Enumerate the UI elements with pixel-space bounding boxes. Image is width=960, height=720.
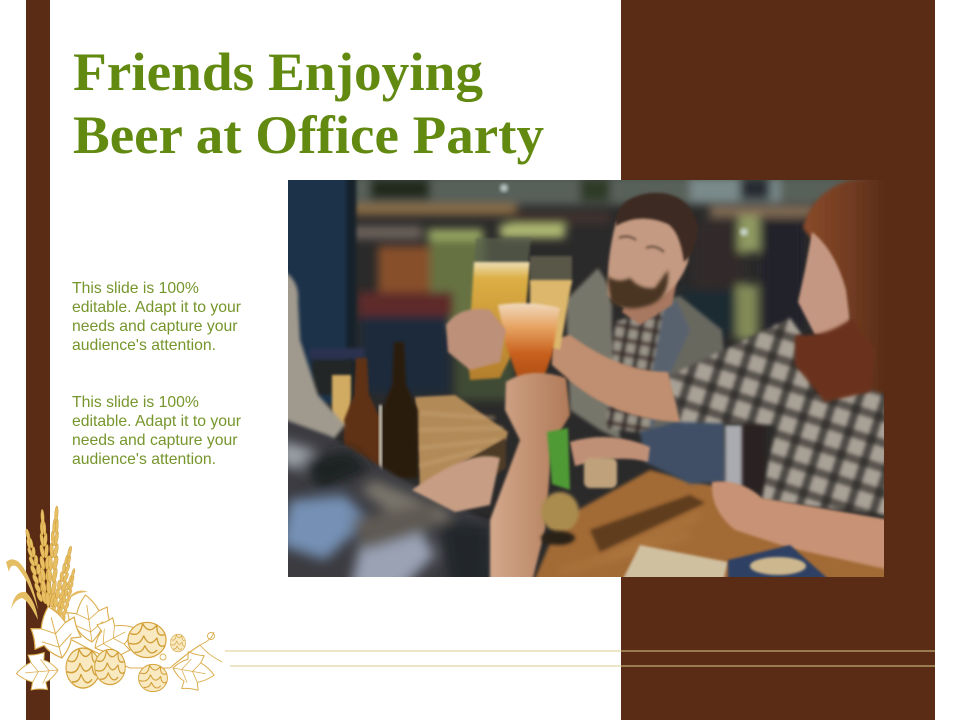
hop leaves — [15, 592, 222, 694]
text block: first paragraph: editable. Adapt it to your — [72, 299, 241, 316]
title: Beer at Office Party — [73, 105, 544, 165]
text block: first paragraph: audience's attention. — [72, 337, 216, 354]
background: blurred bar interior — [288, 175, 884, 577]
left brown band — [26, 0, 50, 720]
man in grey blazer — [566, 193, 726, 488]
hop cones — [66, 622, 186, 692]
text block: first paragraph — [72, 280, 241, 354]
wheat ears — [6, 506, 88, 625]
curtain column — [280, 172, 356, 404]
text block: second paragraph: needs and capture your — [72, 432, 238, 449]
text block: second paragraph — [72, 394, 241, 468]
decorative lines — [225, 650, 935, 666]
text block: second paragraph: editable. Adapt it to your — [72, 413, 241, 430]
person in foreground: beard, arm and plaid shirt — [280, 268, 579, 590]
title — [73, 42, 544, 165]
text block: first paragraph: This slide is 100% — [72, 280, 199, 297]
wooden table — [415, 395, 900, 590]
photo: friends toasting beer — [288, 180, 884, 577]
right brown panel — [621, 0, 935, 720]
snack plate and napkin — [620, 545, 835, 585]
text block: second paragraph: This slide is 100% — [72, 394, 199, 411]
text block: second paragraph: audience's attention. — [72, 451, 216, 468]
title: Friends Enjoying — [73, 42, 483, 102]
beer bottles — [310, 342, 418, 478]
man with long red hair and plaid shirt — [552, 176, 890, 570]
text block: first paragraph: needs and capture your — [72, 318, 238, 335]
ornament: wheat and hops — [6, 506, 222, 692]
beer glasses — [446, 238, 572, 388]
